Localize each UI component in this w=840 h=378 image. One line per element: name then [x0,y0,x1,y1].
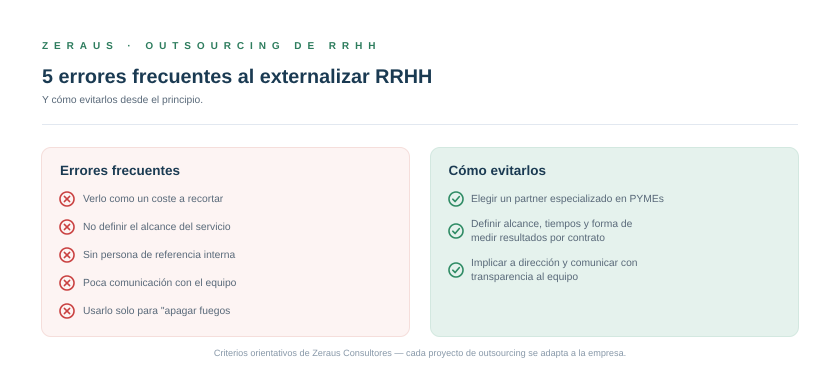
error item 1: Verlo como un coste a recortar [83,194,223,204]
icon: cross 4 [59,275,75,291]
subtitle: Y cómo evitarlos desde el principio. [42,94,203,106]
icon: cross 5 [59,303,75,319]
icon: cross 2 [59,219,75,235]
solution item 3: Implicar a dirección y comunicar con [471,258,638,268]
error item 4: Poca comunicación con el equipo [83,278,236,288]
solution item 2: medir resultados por contrato [471,232,605,244]
icon: check 2 [448,223,464,239]
title: 5 errores frecuentes al externalizar RRHH [42,66,432,88]
icon: check 3 [448,262,464,278]
solution item 1: Elegir un partner especializado en PYMEs [471,194,664,204]
footer note: Criterios orientativos de Zeraus Consultores — cada proyecto de outsourcing se adapta a la empresa. [214,348,626,358]
panel: cómo evitarlos [430,147,799,337]
error item 2: No definir el alcance del servicio [83,222,231,232]
panel heading: soluciones: Cómo evitarlos [448,162,546,178]
eyebrow label: ZERAUS · OUTSOURCING DE RRHH [42,41,381,52]
panel heading: errores: Errores frecuentes [60,162,180,178]
icon: cross 3 [59,247,75,263]
panel: errores frecuentes [41,147,410,337]
icon: cross 1 [59,191,75,207]
solution item 2: Definir alcance, tiempos y forma de [471,218,632,230]
solution item 3: transparencia al equipo [471,272,578,282]
icon: check 1 [448,191,464,207]
error item 5: Usarlo solo para "apagar fuegos [83,306,230,316]
error item 3: Sin persona de referencia interna [83,250,235,260]
solution item 2 [471,218,632,244]
solution item 3 [471,258,638,282]
